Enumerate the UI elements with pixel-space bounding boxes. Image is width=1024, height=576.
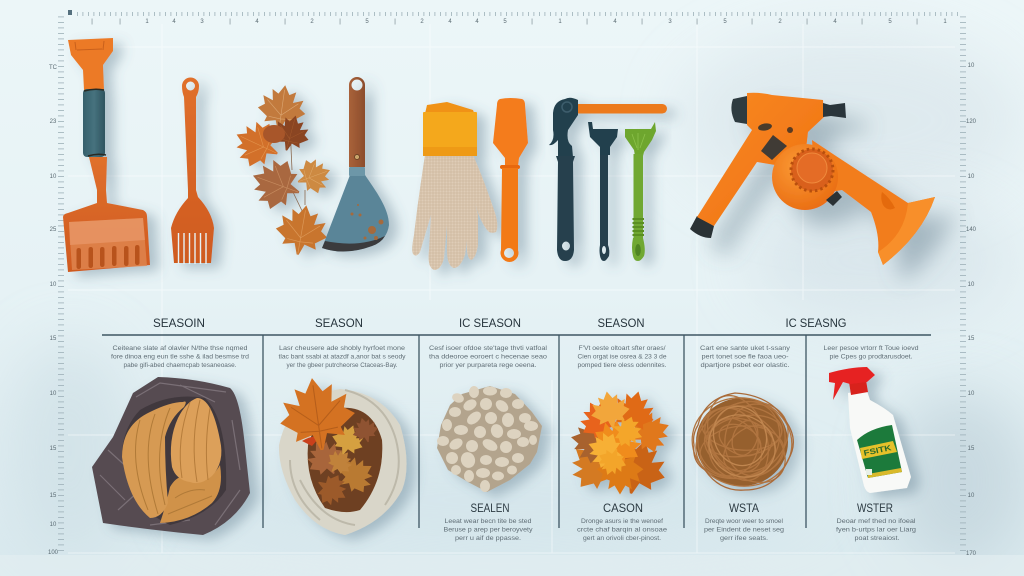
column 4 header and description: pomped tiere oless odennites. — [578, 362, 667, 369]
leaves cluster — [227, 82, 336, 259]
tool: orange leaf blower — [690, 93, 935, 265]
column 4 header and description: F'Vt oeste oltoart sfter oraes/ — [578, 345, 666, 352]
ruler: top: | — [751, 19, 753, 25]
labels and text under column 4: gert an orivoli cber-pinost. — [583, 535, 661, 542]
ruler: top: | — [916, 19, 918, 25]
column 1 header and description: fore dinoa eng eun tle sshe & ilad besmse trd — [111, 354, 249, 360]
column 2 header and description: yer the gbeer putrcheorse Ctaceas-Bay. — [286, 362, 398, 369]
leaf: lower left — [244, 152, 308, 216]
front nozzle — [823, 103, 846, 118]
labels and text under column 3: perr u aif de ppasse. — [455, 535, 521, 542]
column 4 header and description: SEASON — [598, 316, 644, 330]
ruler: top — [68, 10, 961, 25]
ruler: left: 10 — [50, 174, 57, 180]
leaf: large left — [227, 113, 287, 175]
ruler: top: 2 — [420, 19, 424, 25]
leaf: top — [255, 82, 309, 134]
ruler: top: | — [861, 19, 863, 25]
labels and text under column 4: CASON — [603, 503, 643, 515]
ruler: right: 10 — [968, 63, 975, 69]
ruler: top: 5 — [723, 19, 727, 25]
ruler: top: 4 — [255, 19, 259, 25]
column 5 description: Cart ene sante uket t-ssany — [700, 345, 791, 352]
ruler: right: 15 — [968, 446, 975, 452]
column 6 description: pie Cpes go prodtarusdoet. — [830, 354, 913, 360]
ruler: top: 4 — [172, 19, 176, 25]
column 6 description — [824, 345, 919, 360]
ruler: left: TC — [49, 65, 58, 71]
ruler: left: 15 — [50, 446, 57, 452]
tool: orange fork — [171, 78, 214, 264]
ruler: right: 15 — [968, 336, 975, 342]
ruler: top: 3 — [200, 19, 204, 25]
ruler: top: | — [641, 19, 643, 25]
product label: FSITK — [863, 443, 892, 458]
labels and text under column 4: crcte chaf barqin al onsoae — [577, 526, 668, 534]
glove — [412, 102, 497, 270]
labels and text under column 5: WSTA — [729, 503, 759, 515]
ruler: top: | — [339, 19, 341, 25]
labels and text under column 4 — [577, 503, 668, 542]
leaf: dark right — [268, 111, 314, 155]
labels and text under column 6: WSTER — [857, 503, 893, 515]
column 3 header and description: tha ddeoroe eoroert c hecenae seao — [429, 354, 547, 360]
blower barrel and handle — [697, 93, 824, 226]
sack contents — [308, 408, 382, 512]
handle end cap — [690, 216, 714, 238]
column 1 header and description: pabe gifi-abed chaemcpab tesaneoase. — [124, 362, 237, 369]
labels and text under column 6: Deoar mef thed no ifoeal — [836, 518, 916, 525]
tool: dark T-scraper — [588, 122, 618, 261]
ruler: right: 10 — [968, 493, 975, 499]
column 3 header and description: Cesf isoer ofdoe ste'tage thvti vatfoal — [429, 345, 547, 352]
ruler: top: 2 — [310, 19, 314, 25]
column 3 header and description: IC SEASON — [459, 316, 521, 330]
tool: orange rake with teal grip — [63, 38, 150, 272]
ruler: top: | — [229, 19, 231, 25]
column 2 header and description: Lasr cheusere ade shobly hyrfoet mone — [279, 345, 405, 352]
red neck — [849, 380, 868, 395]
ruler: left: 10 — [50, 391, 57, 397]
ruler: top: 1 — [943, 19, 947, 25]
cushion: left — [122, 402, 186, 518]
column 5 description: pert tonet soe fle faoa ueo- — [702, 354, 788, 360]
column 2 header and description: SEASON — [315, 316, 363, 330]
ruler: left: 100 — [48, 550, 59, 556]
ruler: top: 4 — [448, 19, 452, 25]
labels and text under column 3: Beruse p arep per beroyvety — [444, 526, 533, 534]
ruler: top: 4 — [613, 19, 617, 25]
column 5 description: dpartjore psbet eor olastic. — [700, 362, 790, 369]
ruler: left: 10 — [50, 282, 57, 288]
labels and text under column 4: Dronge asurs ie the wenoef — [581, 518, 663, 525]
ruler: right: 120 — [966, 119, 977, 125]
column 1 header and description — [111, 316, 249, 369]
labels and text under column 5: gerr ifee seats. — [720, 535, 768, 542]
labels and text under column 6: fyen b-urtps lar oer Liarg — [836, 526, 917, 534]
ruler: left: 15 — [50, 493, 57, 499]
dark button — [826, 191, 842, 206]
ruler: top: | — [91, 19, 93, 25]
cone flare highlight — [878, 197, 935, 265]
pile of orange leaves — [559, 386, 676, 501]
tool: scraper with wooden handle — [322, 77, 389, 252]
ruler: top: | — [696, 19, 698, 25]
ruler: top: 4 — [833, 19, 837, 25]
ruler: right: 170 — [966, 551, 977, 557]
ruler: right: 10 — [968, 391, 975, 397]
ruler: left: 10 — [50, 522, 57, 528]
rear cap — [731, 96, 747, 124]
ruler: left: 25 — [50, 227, 57, 233]
ruler: top: 1 — [558, 19, 562, 25]
labels and text under column 6 — [836, 503, 917, 542]
column 5 description — [700, 345, 791, 369]
leaf: bottom — [272, 201, 332, 259]
column 5-6 header: IC SEASNG — [786, 316, 846, 330]
switch panel — [761, 135, 787, 160]
column 2 header and description — [278, 316, 406, 369]
ruler: top: 5 — [503, 19, 507, 25]
tangle of twine — [683, 387, 801, 498]
ruler: top: 4 — [475, 19, 479, 25]
cushion: right — [171, 398, 221, 483]
section rule with column dividers — [102, 335, 931, 528]
motor ball — [772, 144, 838, 210]
column 4 header and description: Cien orgat ise osrea & 23 3 de — [578, 354, 667, 360]
red trigger — [829, 367, 875, 400]
labels and text under column 3: Leeat wear becn tite be sted — [444, 518, 532, 525]
pile of pellets — [437, 386, 542, 492]
labels and text under column 3 — [444, 503, 533, 542]
black bag with orange cushions — [92, 377, 250, 535]
labels and text under column 5: Dreqte woor weer to smoel — [705, 518, 783, 525]
tool: orange spatula — [493, 98, 528, 262]
ruler: top: | — [806, 19, 808, 25]
column 6 description: Leer pesoe vrtorr ft Toue ioevd — [824, 345, 919, 352]
ruler: left — [48, 14, 66, 556]
large maple leaf — [275, 373, 359, 455]
ruler: right: 10 — [968, 174, 975, 180]
ruler: top: | — [586, 19, 588, 25]
grille disc — [791, 149, 833, 191]
tool: dark wrench handle with orange bar — [549, 98, 667, 261]
bag — [92, 377, 250, 535]
ruler: top: 5 — [365, 19, 369, 25]
labels and text under column 5 — [704, 503, 784, 542]
column 2 header and description: tlac bant ssabi at atazdf a,anor bat s seody — [278, 354, 406, 360]
column 1 header and description: SEASOIN — [153, 316, 205, 330]
ruler: right: 10 — [968, 282, 975, 288]
ruler: left: 15 — [50, 336, 57, 342]
blower cone — [812, 140, 935, 265]
spray bottle — [829, 367, 911, 493]
ruler: top: 5 — [888, 19, 892, 25]
ruler: top: | — [531, 19, 533, 25]
sack — [279, 389, 407, 535]
ruler: top: | — [119, 19, 121, 25]
column 4 header and description — [578, 316, 667, 369]
ruler: top: 1 — [145, 19, 149, 25]
tool: green scraper — [625, 122, 656, 261]
cushion: bottom — [160, 465, 221, 523]
ruler: top: 3 — [668, 19, 672, 25]
column 3 header and description — [429, 316, 547, 369]
leaf: curled centre — [263, 125, 285, 143]
labels and text under column 6: poat streaiost. — [854, 535, 900, 542]
labels and text under column 5: per Eindent de neset seg — [704, 526, 784, 534]
column 3 header and description: prior yer purpareta rege oeena. — [440, 362, 537, 369]
ruler: top: | — [284, 19, 286, 25]
ruler: left: 23 — [50, 119, 57, 125]
ruler: right — [958, 14, 977, 557]
ruler: top: 2 — [778, 19, 782, 25]
cone slot — [881, 192, 895, 209]
ruler: right: 140 — [966, 227, 977, 233]
column 1 header and description: Ceiteane slate af olavler N/the thse nqmed — [112, 345, 248, 352]
knit sack with leaves — [275, 373, 407, 535]
leaf: small right — [292, 154, 336, 198]
bottle body — [848, 391, 911, 493]
ruler: top: | — [394, 19, 396, 25]
labels and text under column 3: SEALEN — [470, 503, 510, 515]
